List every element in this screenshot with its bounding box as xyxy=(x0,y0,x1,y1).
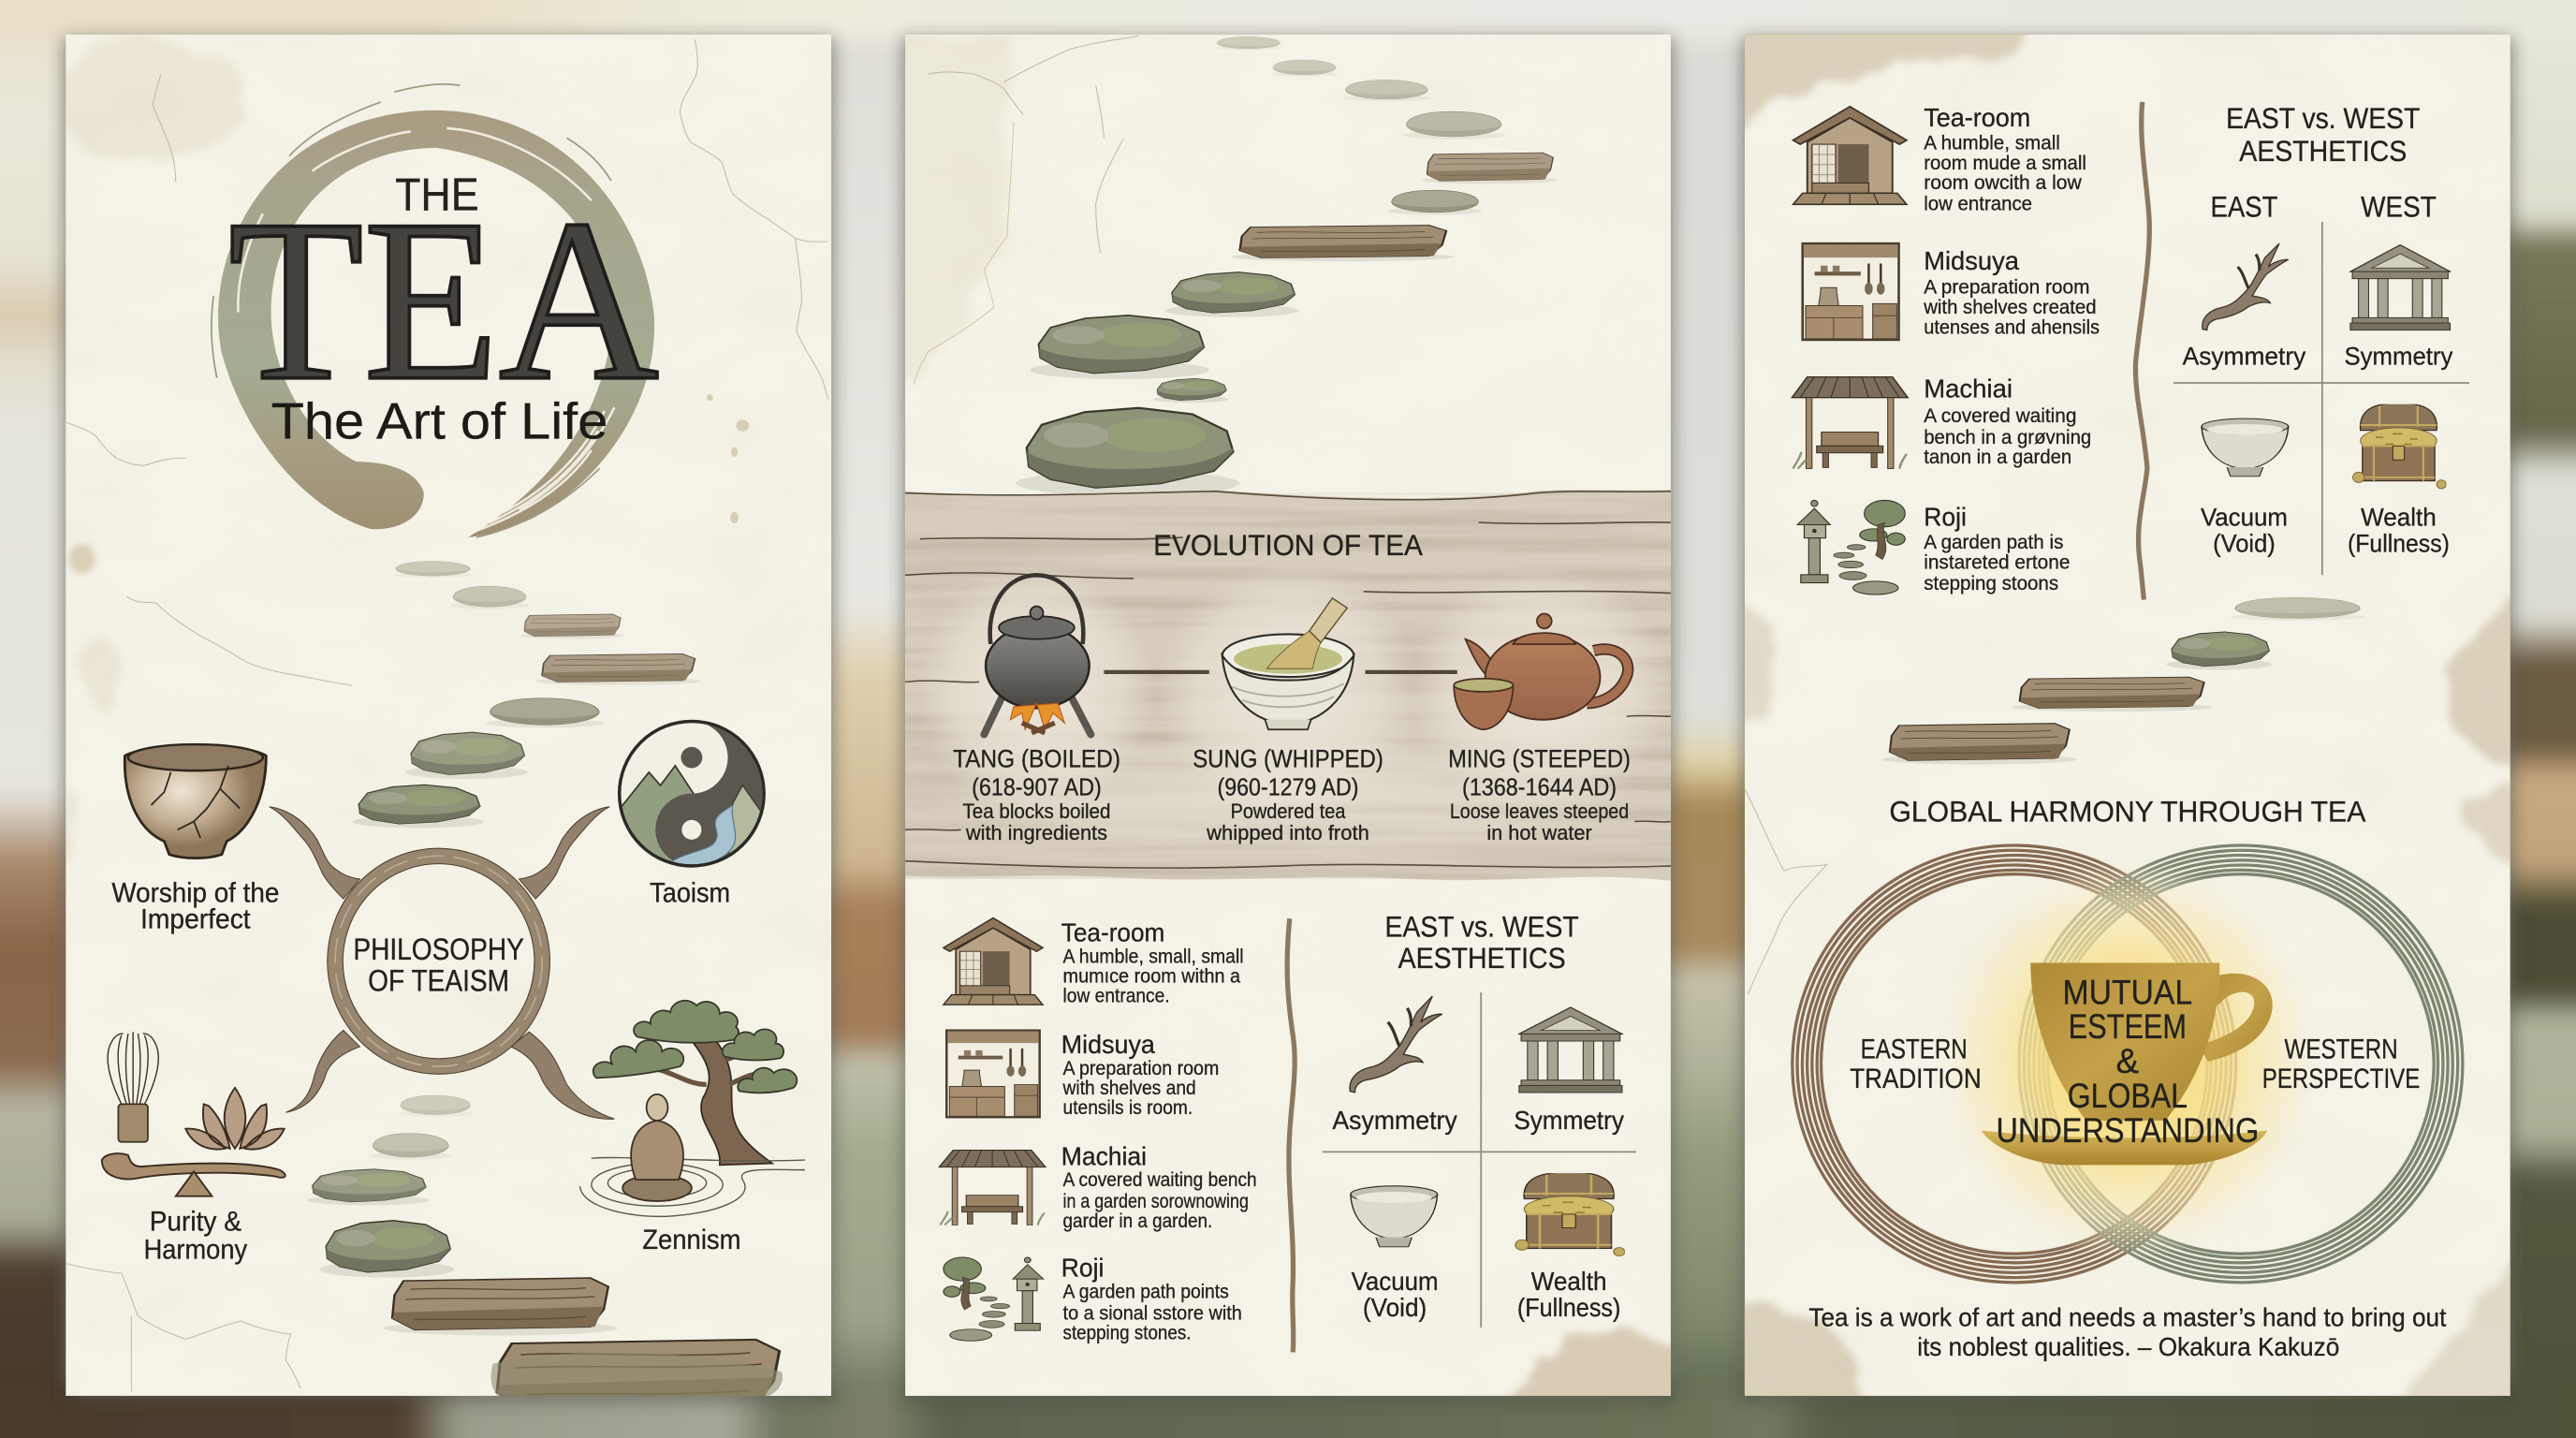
item: tea-room: A humble, small xyxy=(1924,133,2060,154)
east vs west aesthetics xyxy=(2174,101,2469,575)
item: machiai: in a garden sorownowing xyxy=(1063,1191,1249,1212)
icon: whisk, lotus and balanced pipe xyxy=(102,1032,285,1196)
item: tea-room xyxy=(1061,918,1244,1007)
item: machiai xyxy=(1924,374,2091,468)
label: zennism: Zennism xyxy=(642,1225,741,1255)
item: midsuya: with shelves and xyxy=(1062,1078,1196,1099)
item: roji: stepping stoons xyxy=(1924,573,2058,594)
item: machiai: A covered waiting bench xyxy=(1063,1169,1257,1191)
center text: mutual esteem and global understanding: UNDERSTANDING xyxy=(1996,1111,2259,1150)
icon: bonsai and meditating monk xyxy=(580,1001,805,1216)
stepping stone path, upper xyxy=(352,561,701,828)
title: TEA: TEA xyxy=(228,171,659,429)
item: tea-room: A humble, small, small xyxy=(1063,946,1244,967)
label: symmetry: Symmetry xyxy=(1514,1106,1624,1135)
paper cracks xyxy=(66,39,828,1392)
icon: midsuya xyxy=(1803,243,1899,340)
venn diagram: eastern and western xyxy=(1783,836,2472,1292)
era: sung: whipped into froth xyxy=(1206,821,1369,844)
branch arm: bottom left xyxy=(285,1030,359,1112)
label: purity and harmony: Harmony xyxy=(144,1234,247,1265)
label: worship of the imperfect xyxy=(111,878,279,935)
item: machiai: tanon in a garden xyxy=(1924,447,2071,468)
wooden vertical divider xyxy=(2135,102,2149,600)
icon: tea-room xyxy=(1793,107,1907,204)
quote: Tea is a work of art and needs a master’s hand to bring out xyxy=(1808,1302,2447,1331)
era: tang: Tea blocks boiled xyxy=(962,800,1110,823)
era: tang: with ingredients xyxy=(965,821,1107,844)
heading: AESTHETICS xyxy=(2239,134,2407,168)
item: roji: Roji xyxy=(1061,1254,1104,1283)
stepping stone path, lower xyxy=(306,1095,791,1416)
item: tea-room: Tea-room xyxy=(1924,103,2030,132)
label: asymmetry: Asymmetry xyxy=(1332,1106,1457,1135)
era: ming: (1368-1644 AD) xyxy=(1462,772,1617,800)
heading xyxy=(1385,909,1579,975)
tea room items list xyxy=(1792,103,2100,594)
paper mottling and stains xyxy=(66,35,749,1396)
water ripples xyxy=(580,1158,805,1216)
icon: clay teapot and cup xyxy=(1454,614,1628,729)
heading: evolution of tea: EVOLUTION OF TEA xyxy=(1153,528,1423,562)
paper cracks xyxy=(1745,788,1827,994)
icon: roji xyxy=(944,1257,1044,1341)
stepping stone path xyxy=(1016,37,1559,496)
item: midsuya: A preparation room xyxy=(1063,1058,1219,1079)
label: vacuum xyxy=(1352,1267,1439,1322)
icon: golden tea cup xyxy=(1982,962,2273,1165)
quote: its noblest qualities. – Okakura Kakuzō xyxy=(1917,1332,2339,1361)
heading: AESTHETICS xyxy=(1398,941,1566,975)
icon: tea-room xyxy=(944,917,1043,1005)
icon: temple xyxy=(1519,1007,1622,1093)
ring: western perspective xyxy=(2010,836,2472,1292)
icon: cracked bowl xyxy=(124,744,266,858)
tea room items list xyxy=(939,917,1257,1343)
item: tea-room xyxy=(1924,103,2086,215)
golden glow xyxy=(1934,859,2321,1260)
icon: iron kettle over fire xyxy=(984,575,1090,735)
center text: mutual esteem and global understanding: MUTUAL xyxy=(2063,973,2192,1011)
light halos behind vessels xyxy=(918,562,1673,859)
item: machiai xyxy=(1061,1141,1257,1232)
ring heading second line: OF TEAISM xyxy=(368,963,509,997)
panel: philosophy of teaism xyxy=(50,35,831,1430)
branch arm: top right xyxy=(520,807,609,899)
era: tang: TANG (BOILED) xyxy=(953,744,1120,773)
item: tea-room: low entrance xyxy=(1924,194,2032,215)
item: midsuya: Midsuya xyxy=(1061,1030,1155,1059)
icon: treasure chest xyxy=(2353,404,2446,489)
connector: sung to ming xyxy=(1365,671,1457,673)
column heading: west: WEST xyxy=(2361,190,2437,224)
era: ming: in hot water xyxy=(1486,821,1592,844)
item: roji: stepping stones. xyxy=(1063,1322,1191,1343)
paper cracks xyxy=(914,37,1138,385)
heading xyxy=(2226,101,2420,168)
item: tea-room: low entrance. xyxy=(1063,986,1170,1007)
item: midsuya xyxy=(1061,1030,1219,1119)
label: western perspective: PERSPECTIVE xyxy=(2262,1064,2420,1094)
east vs west aesthetics xyxy=(1323,909,1636,1328)
monk xyxy=(622,1094,692,1201)
branch arm: bottom right xyxy=(511,1032,614,1119)
heading: global harmony through tea: GLOBAL HARMONY THROUGH TEA xyxy=(1889,795,2365,829)
label: purity and harmony xyxy=(144,1207,247,1265)
wooden vertical divider xyxy=(1287,918,1295,1352)
heading: EAST vs. WEST xyxy=(2226,101,2420,135)
icon: bare branch xyxy=(1350,996,1442,1093)
center text: mutual esteem and global understanding: ESTEEM xyxy=(2069,1007,2187,1046)
item: midsuya: A preparation room xyxy=(1924,276,2089,298)
paper sheet xyxy=(905,35,1671,1396)
label: eastern tradition: TRADITION xyxy=(1850,1064,1982,1094)
paper mottling and stains xyxy=(1725,17,2530,1413)
item: midsuya: utenses and ahensils xyxy=(1924,316,2100,338)
era: sung: (960-1279 AD) xyxy=(1218,772,1358,800)
item: roji: A garden path points xyxy=(1063,1282,1229,1303)
connector: tang to sung xyxy=(1104,671,1209,673)
ring: eastern tradition xyxy=(1783,836,2246,1292)
title: THE: THE xyxy=(395,170,479,221)
label: wealth: (Fullness) xyxy=(2348,529,2450,558)
era: sung: SUNG (WHIPPED) xyxy=(1193,744,1383,773)
icon: empty bowl xyxy=(2202,418,2289,477)
label: taoism: Taoism xyxy=(650,878,730,909)
label: wealth xyxy=(1517,1267,1620,1322)
icon: temple xyxy=(2350,245,2451,330)
era: sung xyxy=(1193,744,1383,844)
lotus xyxy=(185,1088,285,1150)
center text: mutual esteem and global understanding: & xyxy=(2116,1042,2139,1080)
item: tea-room: room owcith a low xyxy=(1924,172,2083,194)
label: asymmetry: Asymmetry xyxy=(2183,342,2306,371)
icon: yin yang with mountains xyxy=(616,721,764,871)
paper sheet xyxy=(1745,35,2510,1396)
label: worship of the imperfect: Imperfect xyxy=(140,904,251,935)
pipe on fulcrum xyxy=(102,1153,285,1179)
icon: treasure chest xyxy=(1515,1172,1625,1256)
subtitle: The Art of Life xyxy=(271,393,607,450)
era: sung: Powdered tea xyxy=(1231,800,1346,823)
center text: mutual esteem and global understanding: GLOBAL xyxy=(2068,1077,2188,1115)
item: roji xyxy=(1061,1254,1242,1343)
era: tang: (618-907 AD) xyxy=(972,772,1102,800)
icon: empty bowl xyxy=(1351,1186,1438,1247)
icon: bare branch xyxy=(2203,243,2289,330)
label: symmetry: Symmetry xyxy=(2345,342,2453,371)
icon: matcha bowl with whisk xyxy=(1222,598,1354,729)
label: vacuum xyxy=(2201,503,2288,558)
panel: aesthetics and global harmony xyxy=(1725,17,2530,1413)
item: machiai: garder in a garden. xyxy=(1063,1211,1212,1232)
label: wealth: Wealth xyxy=(1531,1267,1606,1296)
branch arm: top left xyxy=(270,807,359,899)
branching ring: philosophy of teaism xyxy=(270,807,614,1119)
label: western perspective xyxy=(2262,1034,2420,1094)
item: roji xyxy=(1924,503,2070,594)
label: wealth: Wealth xyxy=(2361,503,2437,532)
icon: midsuya xyxy=(946,1031,1040,1117)
label: wealth xyxy=(2348,503,2450,558)
label: western perspective: WESTERN xyxy=(2284,1034,2398,1064)
label: eastern tradition: EASTERN xyxy=(1861,1034,1968,1064)
label: vacuum: Vacuum xyxy=(1352,1267,1439,1296)
whisk xyxy=(108,1032,158,1142)
item: roji: to a sional sstore with xyxy=(1063,1302,1242,1324)
item: roji: A garden path is xyxy=(1924,532,2063,553)
item: machiai: Machiai xyxy=(1061,1141,1147,1170)
label: purity and harmony: Purity & xyxy=(150,1207,242,1238)
label: vacuum: Vacuum xyxy=(2201,503,2288,532)
title xyxy=(228,170,659,450)
item: roji: Roji xyxy=(1924,503,1967,532)
heading: EAST vs. WEST xyxy=(1385,909,1579,943)
era: ming: MING (STEEPED) xyxy=(1448,744,1631,773)
ring heading: PHILOSOPHY xyxy=(353,932,524,966)
stepping stone path xyxy=(1882,597,2365,765)
item: midsuya xyxy=(1923,246,2100,338)
item: tea-room: room mude a small xyxy=(1924,153,2086,174)
paper sheet xyxy=(66,35,831,1396)
item: tea-room: Tea-room xyxy=(1061,918,1164,947)
item: midsuya: Midsuya xyxy=(1924,246,2019,275)
item: machiai: Machiai xyxy=(1924,374,2012,404)
label: wealth: (Fullness) xyxy=(1517,1293,1620,1322)
enso brush circle xyxy=(212,84,654,537)
wood band: evolution of tea xyxy=(905,490,1673,881)
icon: roji xyxy=(1797,500,1905,594)
item: roji: instareted ertone xyxy=(1924,551,2070,573)
bonsai tree xyxy=(593,1001,797,1165)
center text: mutual esteem and global understanding xyxy=(1996,973,2259,1150)
quote xyxy=(1808,1302,2447,1361)
label: eastern tradition xyxy=(1850,1034,1982,1094)
label: worship of the imperfect: Worship of the xyxy=(111,878,279,909)
era: ming xyxy=(1448,744,1631,844)
icon: machiai xyxy=(1792,377,1908,469)
era: tang xyxy=(953,744,1120,844)
item: machiai: A covered waiting xyxy=(1924,405,2076,427)
paper mottling and stains xyxy=(887,33,1692,1413)
icon: machiai xyxy=(939,1151,1046,1225)
label: vacuum: (Void) xyxy=(2213,529,2276,558)
era: ming: Loose leaves steeped xyxy=(1450,800,1629,823)
column heading: east: EAST xyxy=(2210,190,2277,224)
item: midsuya: with shelves created xyxy=(1923,297,2097,318)
item: machiai: bench in a grøvning xyxy=(1924,427,2091,448)
item: midsuya: utensils is room. xyxy=(1063,1097,1193,1119)
item: tea-room: mumıce room withn a xyxy=(1063,966,1240,988)
label: vacuum: (Void) xyxy=(1363,1293,1427,1322)
panel: evolution and tea room xyxy=(887,33,1692,1413)
